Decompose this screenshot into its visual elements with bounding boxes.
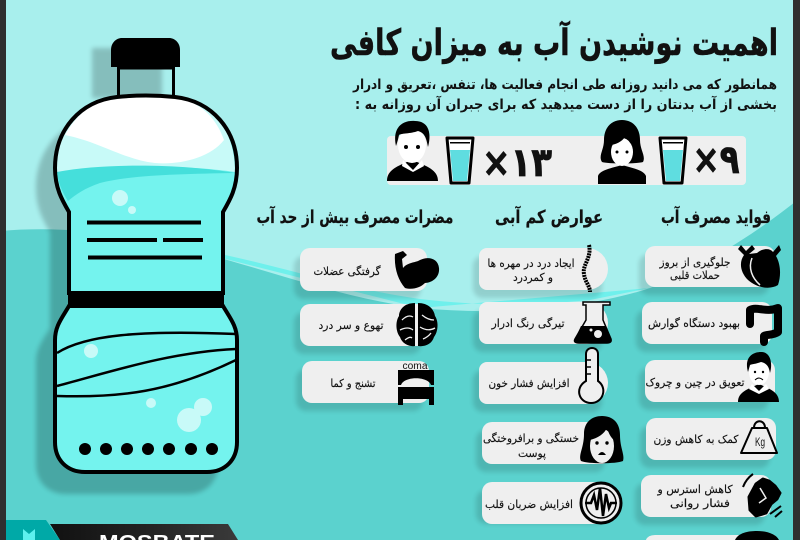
panel: dehydration symptoms: [479, 245, 623, 524]
card: delayed wrinkles: [645, 352, 779, 402]
bottle neck: [118, 68, 174, 98]
panel: benefits of water: [641, 245, 782, 540]
upper bottle body: [55, 96, 237, 293]
card: dark urine: تیرگی رنگ ادرار: [491, 317, 564, 330]
card: muscle cramps: گرفتگی عضلات: [314, 265, 381, 278]
card: seizure and coma: تشنج و کما: [330, 377, 376, 390]
icon: glass: [660, 138, 686, 183]
card: back pain: [479, 245, 608, 292]
card: stress reduction: فشار روانی: [670, 497, 730, 510]
heading: dehydration symptoms: عوارض کم آبی: [495, 205, 603, 228]
card: skin fatigue: خستگی و برافروختگی: [483, 432, 579, 445]
card: nausea and headache: [300, 303, 438, 346]
card: heart attack prevention: [645, 245, 781, 288]
heading: overconsumption harms: مضرات مصرف بیش از حد آب: [256, 205, 454, 228]
multiplier: 9 glasses: ×۹: [692, 137, 740, 183]
card: muscle cramps: [300, 248, 439, 291]
card: skin fatigue: [482, 416, 623, 464]
card: digestive system: [642, 302, 778, 344]
icon: glass: [447, 138, 473, 183]
bottle band: [68, 293, 224, 306]
card: seizure and coma: [302, 361, 434, 405]
icon: woman: [598, 120, 646, 184]
card: digestive system: بهبود دستگاه گوارش: [648, 317, 740, 330]
card: high blood pressure: [479, 348, 608, 404]
bottle cap: [111, 38, 180, 67]
card: weight loss: کمک به کاهش وزن: [654, 433, 739, 446]
card: weight loss: [646, 418, 777, 460]
card: stress reduction: [641, 474, 782, 517]
card: nausea and headache: تهوع و سر درد: [318, 319, 384, 332]
card: cropped bottom benefit: [645, 531, 779, 540]
card shadows: [294, 254, 770, 525]
card: stress reduction: کاهش استرس و: [657, 483, 733, 496]
card: skin fatigue: پوست: [518, 447, 546, 460]
water intake panel: [387, 120, 746, 186]
icon: man: [387, 121, 438, 181]
card: increased heart rate: افزایش ضربان قلب: [485, 498, 573, 511]
card: dark urine: [479, 302, 611, 344]
bottle shadow: [36, 48, 218, 494]
card: seizure and coma: coma: [402, 361, 428, 372]
card: heart attack prevention: جلوگیری از بروز: [659, 256, 730, 269]
intro text: [352, 77, 777, 113]
logo badge: [6, 520, 238, 540]
card: weight loss: Kg: [755, 435, 765, 449]
card: heart attack prevention: حملات قلبی: [670, 269, 720, 282]
card: increased heart rate: [482, 482, 621, 524]
card: delayed wrinkles: تعویق در چین و چروک: [646, 376, 744, 390]
panel: overconsumption harms: [300, 248, 439, 405]
card: high blood pressure: افزایش فشار خون: [488, 377, 570, 390]
lower bottle body: [55, 306, 237, 472]
multiplier: 13 glasses: ×۱۳: [482, 140, 552, 186]
card: back pain: ایجاد درد در مهره ها: [488, 257, 574, 270]
card: back pain: و کمردرد: [513, 271, 553, 284]
